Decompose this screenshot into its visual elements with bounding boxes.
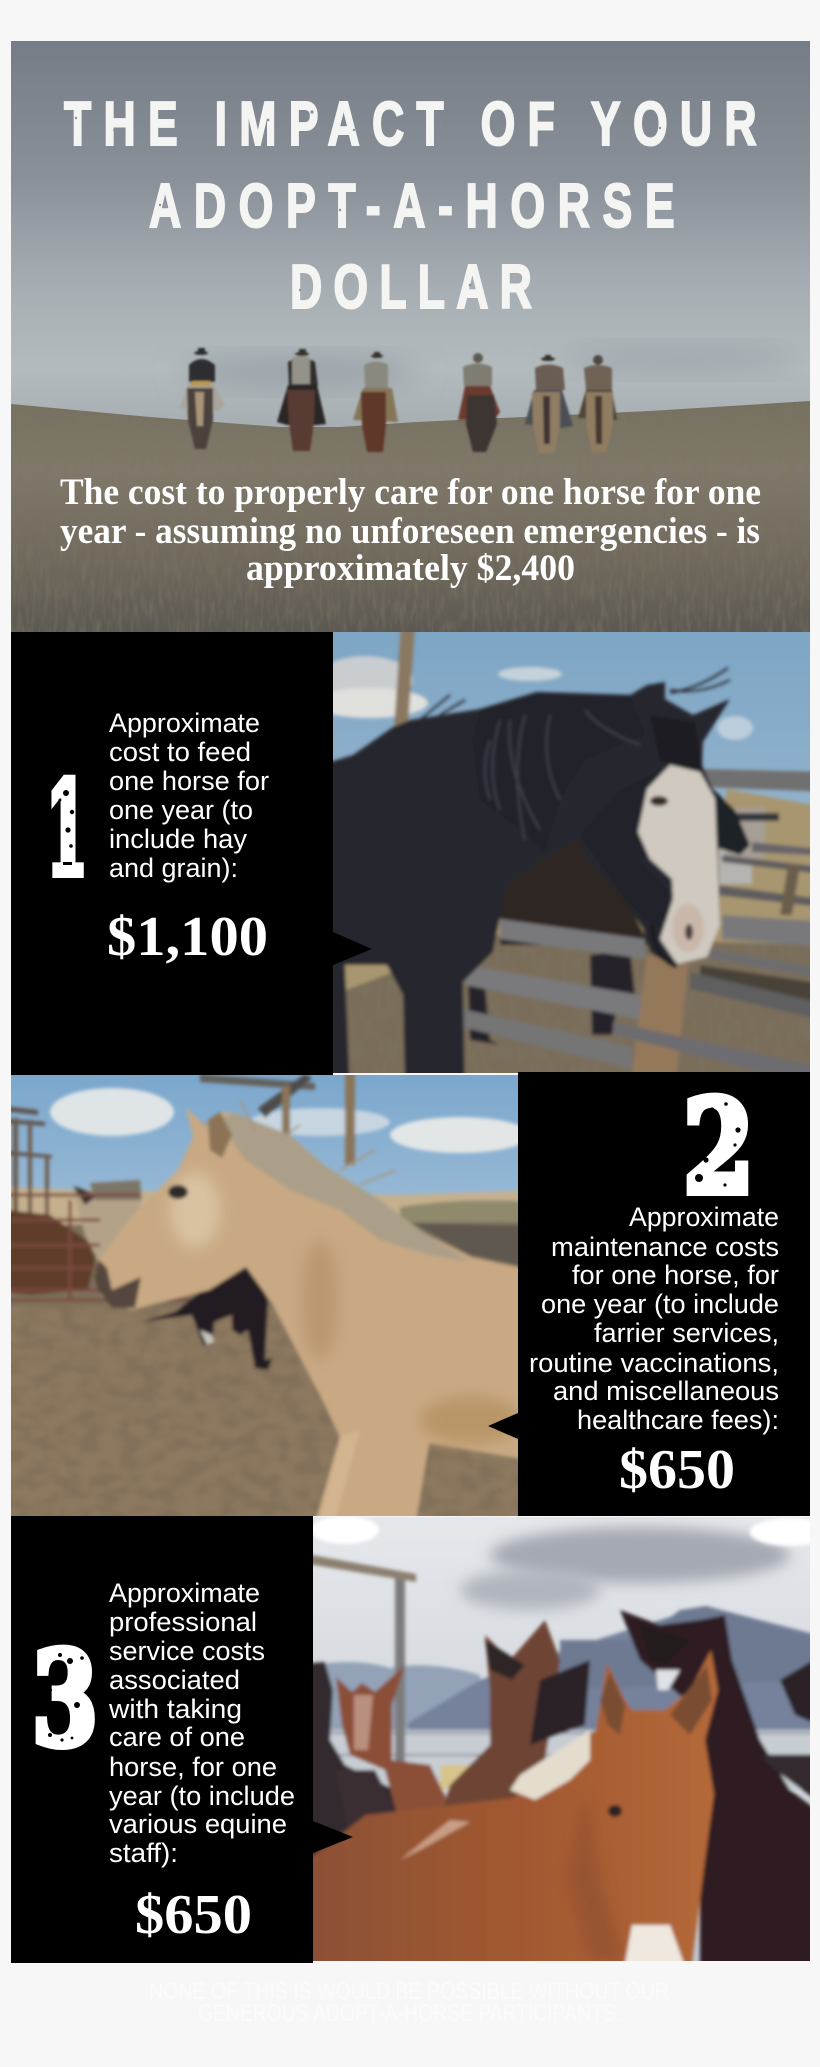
clouds xyxy=(50,1088,174,1136)
main chestnut horse xyxy=(290,1650,718,1980)
description 2: for one horse, for xyxy=(572,1260,779,1290)
header subtitle: year - assuming no unforeseen emergencies - is xyxy=(60,511,760,552)
photo: dark horse with white blaze at fence xyxy=(333,632,810,1073)
hills xyxy=(11,1185,518,1227)
title: ADOPT-A-HORSE xyxy=(149,172,675,241)
description 3: various equine xyxy=(109,1809,287,1839)
truck xyxy=(708,850,752,884)
small chestnut horse xyxy=(336,1665,447,1825)
description 1: one horse for xyxy=(109,766,269,796)
title: DOLLAR xyxy=(290,253,532,322)
post and beam xyxy=(395,1575,405,1765)
header photo: riders on prairie xyxy=(11,41,810,632)
dark horse legs xyxy=(140,1262,272,1370)
back fence rails xyxy=(703,769,820,792)
description 3: Approximate xyxy=(109,1578,260,1608)
right edge horse xyxy=(780,1650,820,1730)
description 2: farrier services, xyxy=(594,1318,779,1348)
mouth xyxy=(652,925,677,966)
description 3: year (to include xyxy=(109,1781,295,1811)
description 2: healthcare fees): xyxy=(577,1405,779,1435)
background horses xyxy=(11,1208,96,1296)
black panel with arrow xyxy=(11,1516,353,1963)
header subtitle xyxy=(60,472,761,589)
rider 3 xyxy=(353,352,398,452)
left dark horse xyxy=(290,1662,405,1870)
description 1: cost to feed xyxy=(109,737,251,767)
rider 4 xyxy=(458,353,500,452)
neck and head shade xyxy=(580,770,670,930)
white blaze xyxy=(638,765,720,964)
footer note xyxy=(149,1978,669,2027)
red gate xyxy=(11,1191,192,1304)
wooden post xyxy=(632,954,688,1072)
description 3 xyxy=(108,1578,295,1868)
clouds xyxy=(333,654,415,694)
price 1: $1,100 xyxy=(107,906,268,968)
forehead tuft xyxy=(652,716,703,769)
ear shading xyxy=(600,1672,625,1735)
description 3: care of one xyxy=(109,1722,245,1752)
description 2: and miscellaneous xyxy=(553,1376,779,1406)
title xyxy=(64,90,757,322)
panel: section 3 professional services xyxy=(11,1500,820,1980)
white forelock xyxy=(510,1730,590,1800)
numeral 3: 3 xyxy=(32,1623,98,1775)
rider 2 xyxy=(277,349,326,451)
head side shade xyxy=(570,1790,625,1961)
rider 5 xyxy=(525,355,573,453)
description 2: one year (to include xyxy=(541,1289,779,1319)
horse body xyxy=(100,1108,518,1516)
dark horse behind xyxy=(500,835,650,945)
description 2: routine vaccinations, xyxy=(529,1348,779,1378)
ear xyxy=(208,1112,232,1158)
header subtitle: The cost to properly care for one horse for one xyxy=(60,472,761,513)
description 1 xyxy=(109,708,269,883)
eye xyxy=(168,1185,188,1199)
overhead beams xyxy=(200,1074,315,1090)
header subtitle: approximately $2,400 xyxy=(246,548,575,589)
mane xyxy=(544,692,625,696)
photo: palomino horse in corral xyxy=(11,1075,518,1516)
panel: header xyxy=(11,41,810,632)
description 2: Approximate xyxy=(629,1202,779,1232)
middle horse xyxy=(440,1620,560,1820)
price 3: $650 xyxy=(135,1884,252,1946)
panel: section 1 feed cost xyxy=(11,632,810,1075)
pale foreground band xyxy=(290,1730,820,1790)
mountain xyxy=(408,1606,820,1740)
description 3: with taking xyxy=(108,1694,242,1724)
far field and fence xyxy=(11,1222,518,1309)
description 3: professional xyxy=(109,1607,257,1637)
black mane horse xyxy=(620,1610,820,1980)
fence rails xyxy=(500,919,645,959)
title: THE IMPACT OF YOUR xyxy=(64,90,757,159)
eye xyxy=(650,796,668,806)
description 3: horse, for one xyxy=(109,1752,277,1782)
ground xyxy=(11,1306,518,1516)
muzzle xyxy=(94,1260,141,1308)
description 1: and grain): xyxy=(109,853,238,883)
horse body xyxy=(320,682,730,1090)
panel: section 2 maintenance cost xyxy=(0,1060,810,1540)
description 1: Approximate xyxy=(109,708,260,738)
description 3: associated xyxy=(109,1665,240,1695)
flank marking xyxy=(400,1820,470,1860)
description 1: include hay xyxy=(109,824,247,854)
clouds xyxy=(490,1527,790,1583)
black panel with arrow xyxy=(11,632,372,1075)
mane xyxy=(200,1113,470,1262)
rider 1 xyxy=(180,348,225,449)
description 2 xyxy=(529,1202,779,1435)
footer note: NONE OF THIS IS WOULD BE POSSIBLE WITHOUT OUR xyxy=(149,1978,669,2005)
blaze xyxy=(622,1925,690,1980)
far hills xyxy=(290,1662,480,1740)
eye xyxy=(608,1805,622,1817)
numeral 1: 1 xyxy=(46,754,88,905)
price 2: $650 xyxy=(619,1439,735,1501)
footer note: GENEROUS ADOPT-A-HORSE PARTICIPANTS. xyxy=(198,2000,621,2027)
fence post top xyxy=(394,625,415,727)
hill and ground xyxy=(342,787,810,992)
description 3: staff): xyxy=(109,1838,178,1868)
photo: herd of horses with mountains xyxy=(290,1500,820,1980)
description 3: service costs xyxy=(109,1636,265,1666)
black panel with arrow xyxy=(488,1072,810,1516)
rider 6 xyxy=(578,355,617,452)
description 1: one year (to xyxy=(109,795,253,825)
numeral 2: 2 xyxy=(683,1073,754,1223)
description 2: maintenance costs xyxy=(551,1232,779,1262)
